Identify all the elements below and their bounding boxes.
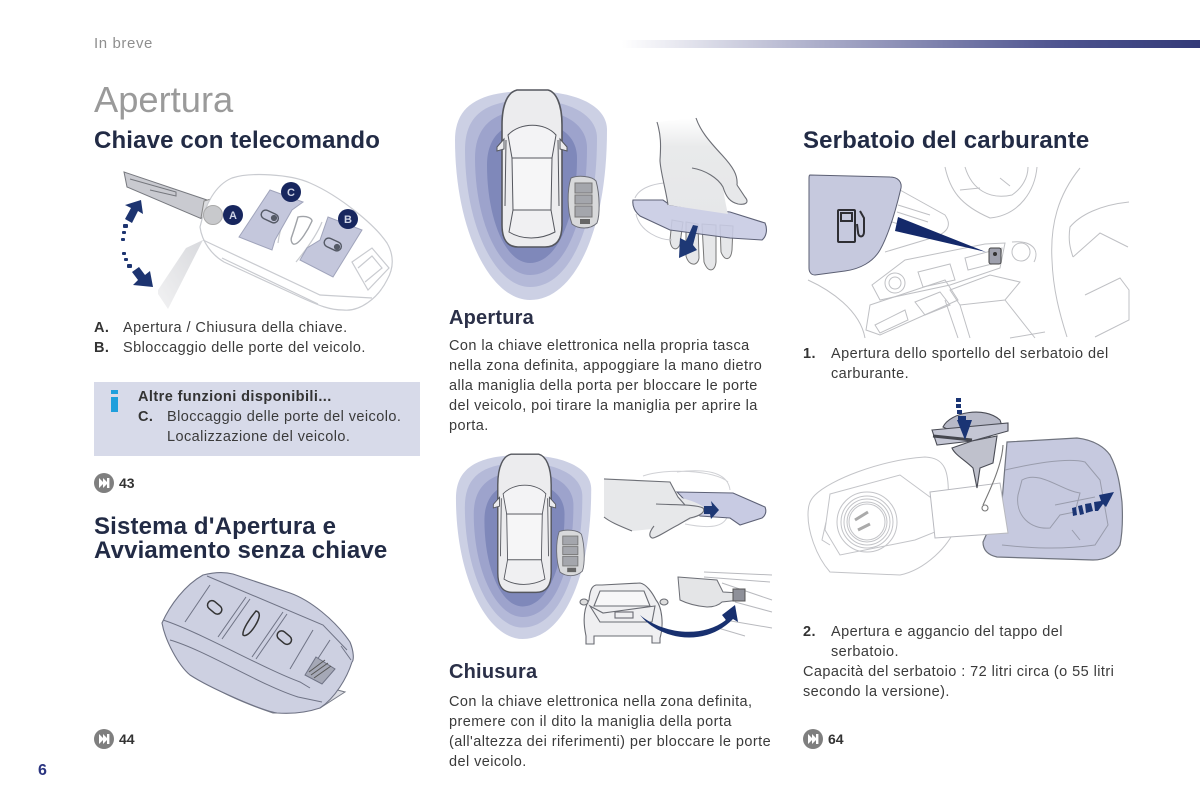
step 1 text: Apertura dello sportello del serbatoio del (831, 346, 1109, 362)
fuel pump icon (838, 210, 864, 242)
push arrow (704, 501, 719, 519)
detection zone bands (455, 91, 607, 300)
heading: key with remote: Chiave con telecomando (94, 127, 380, 154)
page reference 64: 64 (828, 731, 844, 747)
page reference 43 (94, 473, 135, 493)
heading: keyless system: Avviamento senza chiave (94, 537, 387, 564)
opening text (449, 338, 762, 434)
button B (300, 217, 362, 277)
subheading: closing: Chiusura (449, 661, 537, 683)
arrow down: blade rotation (122, 252, 153, 287)
closing text: del veicolo. (449, 754, 527, 770)
down arrow (956, 398, 972, 440)
page title: Apertura (94, 79, 233, 120)
door ghost line (635, 183, 672, 240)
info text: C. (138, 409, 153, 425)
key body (200, 175, 392, 310)
grey release button (204, 206, 222, 224)
opening text: porta. (449, 418, 489, 434)
step 1 text (803, 346, 1109, 382)
hinge strap (930, 483, 1008, 538)
filler surround (808, 457, 955, 575)
door handle (677, 492, 766, 525)
subheading: opening: Apertura (449, 307, 534, 329)
right arrow (1072, 492, 1114, 516)
closing text: Con la chiave elettronica nella zona definita, (449, 694, 753, 710)
info text: Altre funzioni disponibili... (138, 389, 332, 405)
arrow up: blade rotation (121, 200, 143, 241)
illustration: folding key fob (121, 172, 392, 310)
fuel cap (932, 412, 1008, 511)
step 1 text: carburante. (831, 366, 909, 382)
closing text (449, 694, 771, 770)
remote fob (568, 176, 599, 228)
boot lid lines (704, 572, 772, 636)
page reference 44 (94, 729, 135, 749)
badge A: A (229, 210, 237, 222)
closing text: premere con il dito la maniglia della porta (449, 714, 732, 730)
page number: 6 (38, 762, 47, 779)
fingers behind handle (670, 220, 733, 270)
illustration: proximity zone with car and fob (opening) (455, 90, 607, 300)
heading: keyless system: Sistema d'Apertura e (94, 513, 336, 540)
step 2 text: Apertura e aggancio del tappo del (831, 624, 1063, 640)
release switch (989, 248, 1001, 264)
info panel (94, 382, 420, 456)
illustration: keyless fob (162, 573, 353, 713)
badge B: B (344, 214, 352, 226)
illustration: fuel filler with cap and flap (808, 398, 1122, 575)
badge B (338, 209, 358, 229)
step 2 text: serbatoio. (831, 644, 899, 660)
page reference 64 (803, 729, 844, 749)
down arrow (679, 225, 698, 258)
page reference 43: 43 (119, 475, 135, 491)
pointer wedge (895, 217, 986, 252)
heading: keyless system (94, 513, 387, 564)
opening text: nella zona definita, appoggiare la mano dietro (449, 358, 762, 374)
step 1 text: 1. (803, 346, 816, 362)
step 2 text (803, 624, 1114, 700)
ghost blade (158, 240, 203, 309)
step 2 text: 2. (803, 624, 816, 640)
opening text: Con la chiave elettronica nella propria tasca (449, 338, 750, 354)
fuel flap (983, 438, 1122, 560)
key legend: Apertura / Chiusura della chiave. (123, 320, 348, 336)
fuel flap highlight (809, 175, 901, 275)
illustration: dashboard fuel release (808, 167, 1129, 338)
key legend: A. (94, 320, 109, 336)
button C (239, 190, 303, 250)
central car button glyph (291, 216, 312, 244)
illustration: finger pressing door handle (closing) (604, 471, 766, 538)
info text: Localizzazione del veicolo. (167, 429, 350, 445)
key legend (94, 320, 366, 356)
hand (657, 118, 747, 214)
key legend: B. (94, 340, 109, 356)
door handle (633, 200, 766, 240)
car rear outline (580, 583, 668, 644)
opening text: del veicolo, poi tirare la maniglia per aprire la (449, 398, 758, 414)
illustration: proximity zone with car and fob (closing) (456, 454, 591, 639)
illustration: hand pulling handle (opening) (633, 118, 766, 270)
info text: Bloccaggio delle porte del veicolo. (167, 409, 401, 425)
curved blue arrow (640, 605, 738, 637)
info text (138, 389, 401, 445)
header gradient bar (622, 40, 1200, 48)
closing text: (all'altezza dei riferimenti) per bloccare le porte (449, 734, 771, 750)
step 2 text: secondo la versione). (803, 684, 950, 700)
badge C (281, 182, 301, 202)
badge A (223, 205, 243, 225)
heading: fuel tank: Serbatoio del carburante (803, 127, 1089, 154)
hand on tailgate (678, 577, 740, 607)
badge C: C (287, 187, 295, 199)
opening text: alla maniglia della porta per bloccare le porte (449, 378, 758, 394)
key legend: Sbloccaggio delle porte del veicolo. (123, 340, 366, 356)
section label: In breve (94, 35, 153, 52)
key blade (124, 172, 212, 219)
car top view (497, 90, 567, 247)
dashboard line art (808, 167, 1129, 338)
page reference 44: 44 (119, 731, 135, 747)
unlock glyphs (260, 209, 343, 252)
illustration: rear of car with tailgate hand (580, 572, 772, 644)
step 2 text: Capacità del serbatoio : 72 litri circa (o 55 litri (803, 664, 1114, 680)
hand (604, 478, 705, 538)
icon: info i (111, 390, 118, 412)
